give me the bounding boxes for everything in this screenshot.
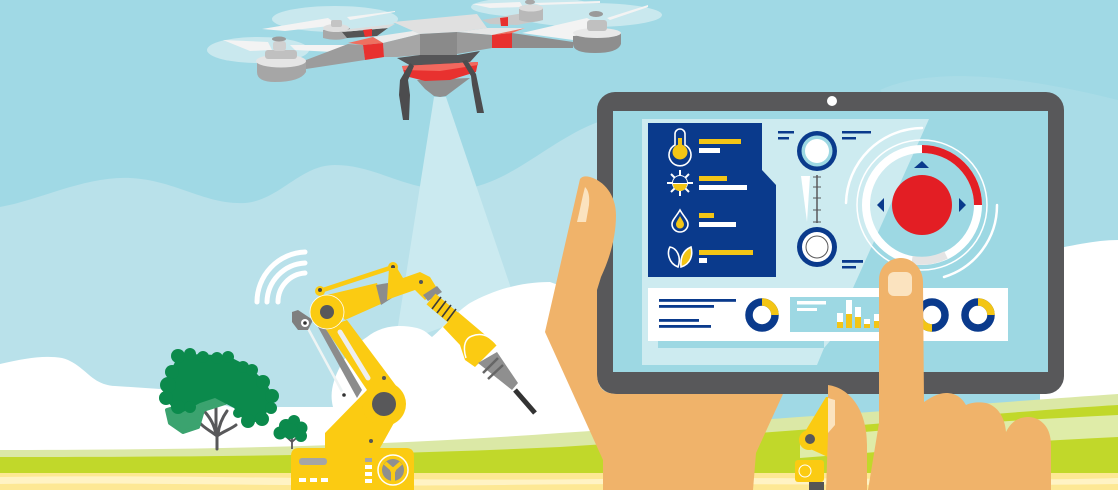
donut chart 3	[965, 302, 991, 328]
tree: trunk and branches	[200, 408, 236, 449]
drone: back left motor and arm	[323, 20, 395, 40]
drone: camera	[417, 78, 470, 97]
robot: spring joint	[423, 286, 456, 321]
tablet: camera dot	[827, 96, 837, 106]
tablet: screen	[613, 111, 1048, 372]
robot: top link	[320, 267, 393, 291]
robot: gray strut	[318, 327, 362, 398]
ground: fields	[0, 394, 1118, 490]
readout bars: water	[699, 213, 736, 227]
robot: lower arm	[325, 383, 405, 448]
robot: arm stripe	[340, 332, 368, 378]
readout bars: temperature	[699, 139, 741, 153]
gauge: bottom	[797, 227, 837, 267]
background mini robot	[795, 397, 830, 490]
robot: wrist	[387, 268, 438, 300]
white clouds	[0, 240, 1118, 470]
robot: elbow joint	[362, 382, 406, 426]
drone: front right arm	[457, 28, 573, 48]
readout bars: light	[699, 176, 747, 190]
thumb nail	[828, 398, 835, 433]
drone: left front motor	[256, 36, 306, 82]
second thumb	[826, 385, 867, 490]
readout bars: crop	[699, 250, 753, 263]
control dial	[846, 128, 997, 277]
drone: red ring	[402, 62, 478, 81]
drone: hull	[393, 14, 492, 67]
panel: sensor readings	[648, 123, 776, 277]
drone	[207, 0, 662, 120]
index finger nail	[888, 272, 912, 296]
robot: shoulder	[292, 310, 313, 330]
drone: rotor discs	[207, 0, 662, 63]
thumb nail	[577, 187, 589, 222]
robot: base	[291, 448, 414, 490]
tablet: light panel	[642, 119, 929, 365]
small tree	[274, 415, 308, 449]
large tree	[159, 348, 279, 449]
tablet: frame	[597, 92, 1064, 394]
panel: bottom stats	[648, 288, 1008, 348]
drone: landing legs	[399, 60, 484, 120]
icon: thermometer	[669, 129, 691, 166]
robot: upper arm	[325, 320, 397, 390]
icon: wifi signal	[257, 252, 305, 302]
icon: sun	[667, 170, 693, 196]
tree: dark canopy	[159, 348, 279, 428]
tablet	[597, 92, 1064, 394]
text lines	[659, 299, 736, 328]
small tree: trunk	[285, 435, 299, 449]
drone: front left arm	[306, 31, 420, 69]
robot: thin rod	[305, 323, 344, 395]
drone: propeller blades	[223, 1, 648, 52]
drone: back right motor and arm	[482, 0, 543, 26]
bar chart	[790, 297, 885, 332]
drone scan beam	[395, 97, 515, 345]
gauge: scale	[801, 175, 821, 223]
drone: right front motor	[573, 11, 621, 53]
robot arm	[291, 262, 535, 490]
donut chart 1	[749, 302, 775, 328]
left hand	[545, 176, 783, 490]
tree: light foliage	[167, 393, 225, 432]
icon: water drop	[672, 210, 688, 232]
robot: forearm	[327, 283, 383, 320]
gauge labels	[778, 131, 871, 268]
icon: leaves	[669, 247, 692, 267]
gauge: top	[797, 131, 837, 171]
donut chart 2	[919, 302, 945, 328]
robot: tool	[478, 352, 535, 413]
robot: gripper	[443, 312, 497, 367]
small tree: canopy	[274, 415, 308, 442]
robot: gray collar	[376, 283, 392, 305]
right hand	[868, 258, 1051, 490]
